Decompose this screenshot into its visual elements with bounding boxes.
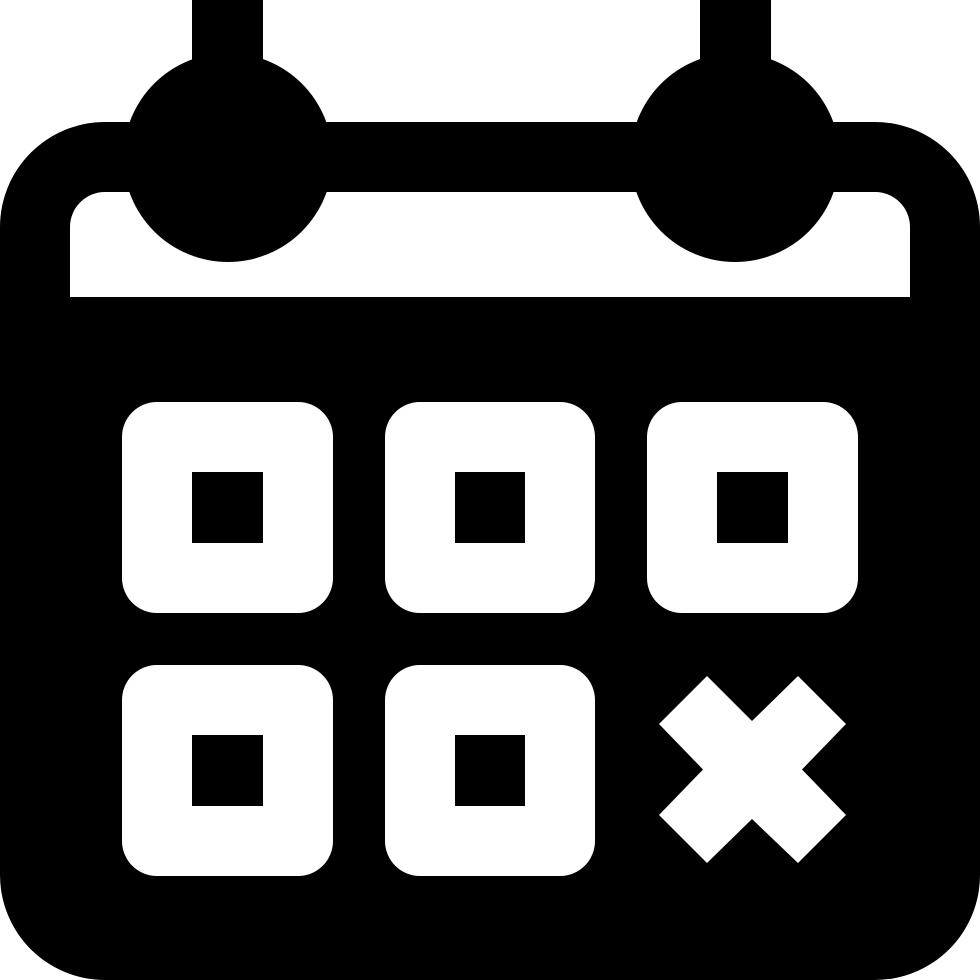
day cell row 1 column 2 <box>385 402 595 613</box>
icon: cancel cross <box>659 676 846 863</box>
day cell row 1 column 3 <box>647 402 858 613</box>
day cell row 2 column 2 <box>385 665 595 876</box>
right binding ring <box>630 0 840 262</box>
day cell row 1 column 1 <box>122 402 333 613</box>
left binding ring <box>124 0 332 262</box>
day cell row 2 column 1 <box>122 665 333 876</box>
